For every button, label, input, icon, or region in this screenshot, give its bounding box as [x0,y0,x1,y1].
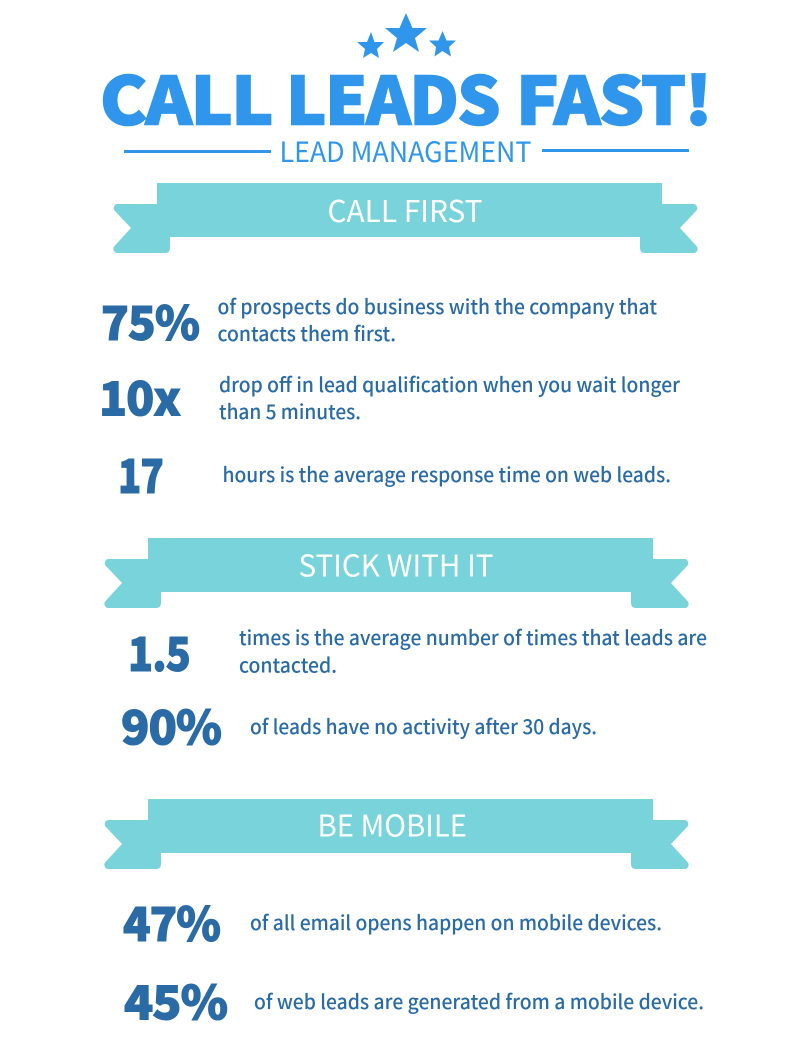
stat: 1.5: 1.5 [128,616,190,685]
stat: 75%: 75% [101,285,200,354]
stat: 1.5 [128,616,707,685]
banner: stick with it [104,538,689,608]
stat: 10x: than 5 minutes. [219,396,361,425]
stat: 75%: contacts them first. [218,318,396,347]
title: CALL [100,48,272,144]
stat: 10x: drop off in lead qualification when you wait longer [219,369,681,398]
stat: 47%: of all email opens happen on mobile devices. [250,907,662,936]
stat: 17: 17 [118,438,163,507]
banner: be mobile [104,799,689,869]
banner: stick with it: STICK WITH IT [298,542,494,586]
stat: 90%: of leads have no activity after 30 days. [250,711,597,740]
title [100,48,711,144]
subtitle with rules [124,131,689,171]
stat: 10x [99,360,681,430]
stat: 10x: 10x [99,360,181,430]
subtitle with rules: LEAD MANAGEMENT [280,131,532,171]
stat: 1.5: times is the average number of times that leads are [239,622,707,651]
title: FAST! [516,48,711,144]
stat: 47%: 47% [123,886,221,955]
stat: 17: hours is the average response time on web leads. [222,459,671,488]
stat: 75%: of prospects do business with the company that [218,291,657,320]
stat: 45%: of web leads are generated from a mobile device. [254,986,704,1015]
banner: call first: CALL FIRST [328,187,483,231]
icon: three stars [357,13,456,58]
title: LEADS [286,48,499,144]
stat: 45%: 45% [124,964,228,1034]
stat: 47% [123,886,662,955]
stat: 75% [101,285,657,354]
stat: 17 [118,438,671,507]
stat: 1.5: contacted. [239,650,337,678]
stat: 45% [124,964,704,1034]
banner: be mobile: BE MOBILE [318,802,467,846]
stat: 90% [121,690,597,758]
banner: call first [113,183,698,253]
stat: 90%: 90% [121,690,222,758]
